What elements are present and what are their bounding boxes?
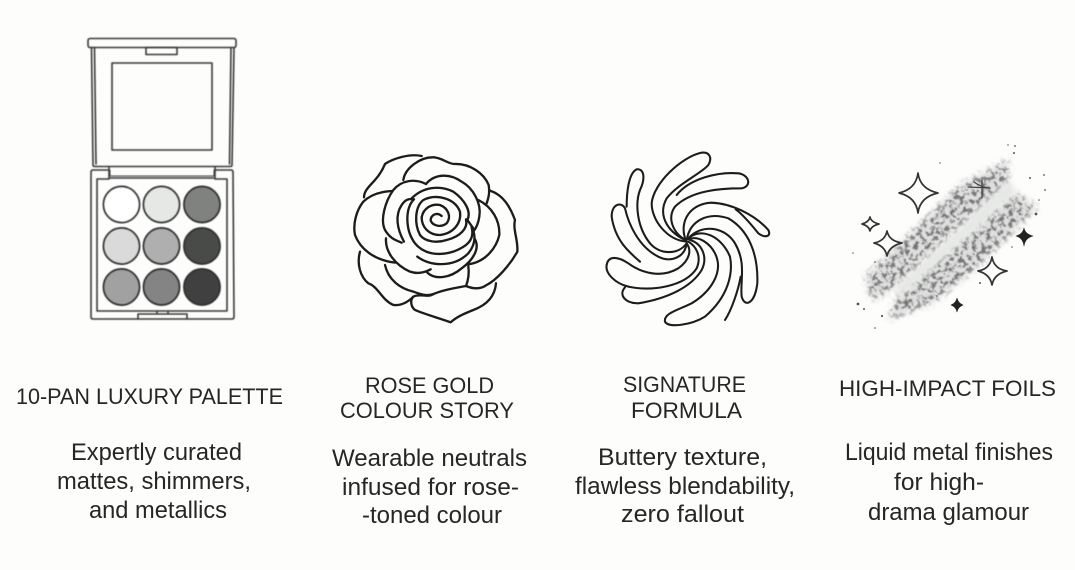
icon: swirl (606, 153, 769, 325)
column 3 heading: SIGNATURE (623, 372, 746, 397)
column 2 heading: COLOUR STORY (340, 398, 514, 423)
column 1 description: and metallics (89, 497, 227, 524)
foil centre streak (895, 180, 1016, 296)
column 2 heading (340, 373, 514, 423)
column 4 description: drama glamour (868, 499, 1029, 526)
outer petals (364, 155, 422, 197)
column 2 description (332, 445, 527, 529)
column 1 description: Expertly curated (71, 439, 242, 466)
inner spiral (407, 199, 472, 254)
column 4 description (845, 439, 1053, 526)
column 2 heading: ROSE GOLD (365, 373, 494, 398)
dark cross sparkle (968, 180, 990, 198)
column 4 description: for high- (894, 469, 984, 496)
column 3 heading: FORMULA (631, 398, 742, 423)
column 3 heading (623, 372, 746, 423)
column 1 heading: 10-PAN LUXURY PALETTE (16, 384, 283, 409)
column 3 description: Buttery texture, (598, 444, 767, 471)
column 2 description: infused for rose- (342, 474, 519, 501)
foil speckles (865, 160, 1037, 320)
column 1 description (57, 439, 251, 524)
palette pans (104, 186, 220, 305)
column 2 description: -toned colour (362, 502, 502, 529)
column 3 description (575, 444, 795, 528)
column 4 description: Liquid metal finishes (845, 439, 1053, 466)
column 1 description: mattes, shimmers, (57, 468, 251, 495)
icon: rose (354, 155, 517, 322)
icon: foil glitter swatch (852, 144, 1046, 329)
column 4 heading: HIGH-IMPACT FOILS (839, 376, 1056, 401)
column 3 description: flawless blendability, (575, 473, 795, 500)
palette lid (88, 38, 236, 166)
column 2 description: Wearable neutrals (332, 445, 527, 472)
icon: eyeshadow palette (88, 38, 236, 319)
middle petals (383, 181, 426, 243)
scattered flecks (852, 144, 1046, 329)
foil base tint (865, 160, 1037, 320)
column 3 description: zero fallout (621, 501, 744, 528)
palette base (91, 166, 234, 319)
swirl arms (652, 153, 710, 242)
sparkle stars (862, 173, 1007, 285)
